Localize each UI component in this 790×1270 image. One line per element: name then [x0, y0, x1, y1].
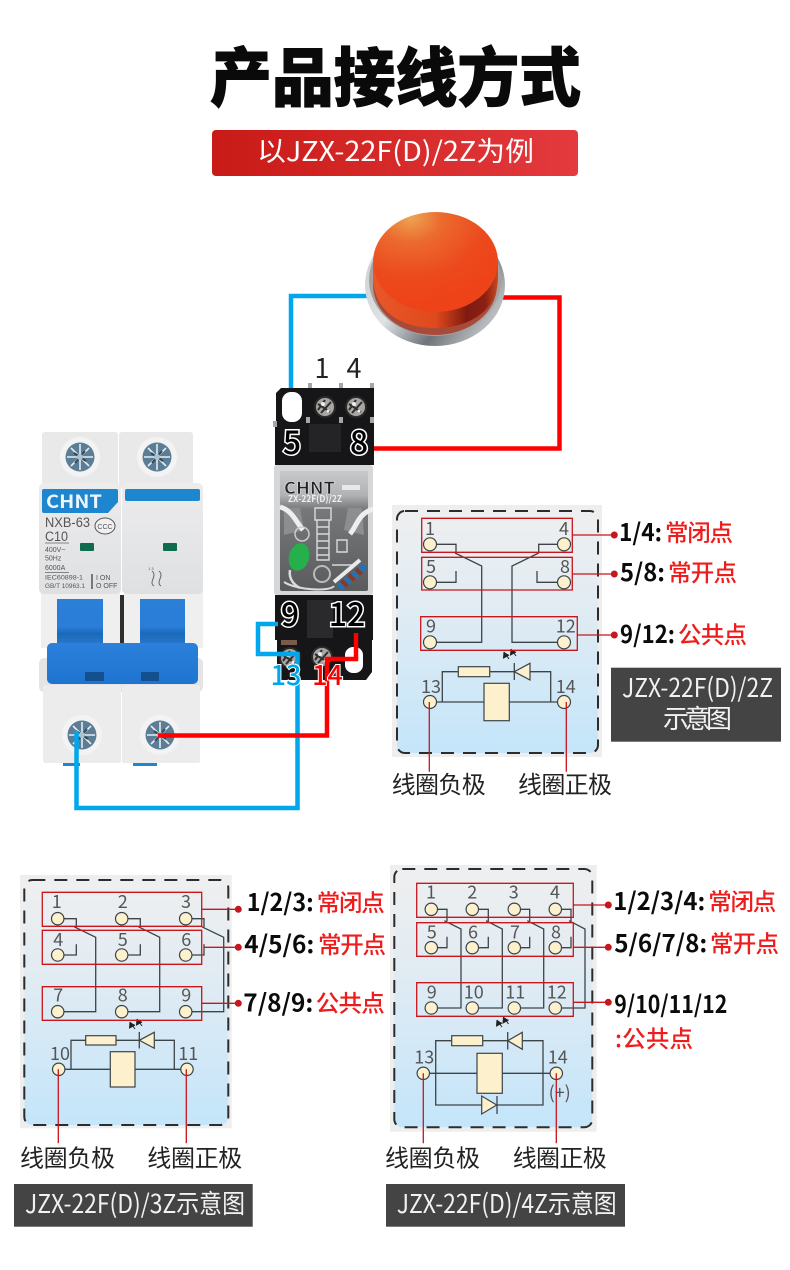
terminal points [417, 903, 562, 1080]
terminal numbers: 5 [426, 553, 436, 579]
coil labels: 3Z: 线圈负极 [20, 1139, 115, 1174]
indicator windows [80, 543, 177, 551]
coil labels: 4Z: 线圈正极 [513, 1139, 607, 1174]
relay terminal labels [271, 347, 368, 693]
callouts: 2Z contacts: 公共点 [678, 616, 747, 650]
leader lines [429, 535, 614, 772]
terminal numbers: 5 [427, 918, 437, 944]
wire: breaker to terminal 14 and 12 (red) [158, 633, 356, 736]
terminal numbers: 1 [425, 515, 435, 541]
leader lines [58, 909, 238, 1143]
callouts: 3Z contacts: 常开点 [318, 926, 386, 960]
relay terminal labels: 13 [271, 654, 301, 693]
photo: CHINT circuit breaker [39, 432, 203, 766]
upper socket recess [309, 424, 341, 452]
terminal numbers: 10 [464, 978, 484, 1004]
coil circuit [423, 1017, 556, 1114]
wire: button to terminal 5 (blue) [291, 296, 368, 425]
coil labels: 4Z [385, 1139, 607, 1174]
breaker specifications: NXB-63 [45, 515, 90, 530]
lower terminal screws [279, 640, 333, 669]
terminal numbers: 11 [178, 1040, 198, 1066]
red grouping boxes [417, 883, 573, 1016]
cover brand: CHNT [284, 474, 335, 499]
caption: 3Z: JZX-22F(D)/3Z示意图 [25, 1184, 245, 1221]
socket upper mounting hole [282, 392, 302, 422]
terminal numbers: 5 [118, 926, 128, 952]
terminal numbers: 14 [556, 673, 576, 699]
callouts: 3Z contacts: 7/8/9: [243, 984, 313, 1018]
terminal numbers: 11 [505, 978, 525, 1004]
terminal numbers: 4 [559, 515, 569, 541]
blue stripe [125, 489, 200, 501]
breaker specifications: 50Hz [45, 556, 62, 562]
terminal numbers: 1 [52, 888, 62, 914]
red grouping boxes [421, 518, 577, 650]
upper terminal screws [314, 396, 367, 418]
terminal numbers: 7 [510, 918, 520, 944]
terminal points [424, 538, 570, 708]
terminal numbers: 4 [53, 926, 63, 952]
contact wiring [58, 919, 224, 1012]
breaker specifications: I ON [96, 575, 110, 582]
breaker specifications: 1 3 [148, 566, 154, 571]
relay terminal labels: 12 [329, 590, 365, 636]
callouts: 3Z contacts: 常闭点 [317, 884, 385, 918]
socket lower mounting hole [345, 647, 363, 673]
callouts: 4Z contacts: 常开点 [710, 925, 779, 959]
terminal numbers: 1 [426, 878, 436, 904]
terminal numbers [414, 878, 571, 1105]
terminal numbers: 8 [118, 982, 128, 1008]
white band [334, 560, 360, 582]
resistor [339, 566, 365, 588]
terminal numbers: 13 [421, 673, 441, 699]
relay terminal labels: 9 [281, 590, 299, 636]
icon: red push button [365, 212, 505, 346]
brand badge [42, 488, 118, 514]
terminal numbers: 2 [118, 888, 128, 914]
socket upper block [275, 388, 374, 465]
relay terminal labels: 8 [350, 418, 368, 464]
breaker specifications: 6000A [45, 565, 66, 572]
blue handle [47, 643, 198, 684]
LED legs [290, 570, 300, 588]
cover model: ZX-22F(D)/2Z [288, 492, 342, 505]
relay clear cover [274, 465, 373, 595]
caption: 2Z [611, 668, 781, 742]
photo: relay with socket [273, 383, 374, 680]
caption: 2Z: JZX-22F(D)/2Z [622, 668, 773, 705]
terminal numbers: 9 [181, 982, 191, 1008]
coil labels: 2Z: 线圈负极 [392, 765, 486, 800]
callouts: 4Z contacts: :公共点 [615, 1020, 693, 1054]
terminal numbers: 2 [467, 878, 477, 904]
relay terminal labels: 14 [312, 654, 343, 693]
terminal numbers: 12 [556, 613, 576, 639]
breaker specifications: CCC [97, 524, 113, 531]
coil circuit [430, 649, 564, 721]
breaker specifications: O OFF [96, 583, 117, 590]
socket lower block [275, 595, 373, 680]
callouts: 3Z contacts [235, 883, 386, 1018]
terminal numbers: 8 [560, 553, 570, 579]
brand badge: CHNT [46, 488, 102, 514]
terminal numbers: 12 [547, 978, 567, 1004]
callouts: 3Z contacts: 公共点 [316, 984, 385, 1018]
coil circuit [59, 1019, 187, 1087]
terminal numbers [50, 888, 198, 1066]
terminal numbers: 3 [181, 888, 191, 914]
switch blocks [41, 590, 203, 648]
terminal numbers: 3 [509, 878, 519, 904]
coil labels: 2Z [392, 765, 612, 800]
callouts: 2Z contacts: 9/12: [620, 615, 675, 650]
breaker specifications: GB/T 10963.1 [45, 583, 85, 590]
contact metal plates [284, 508, 364, 535]
socket metal tabs [273, 383, 374, 427]
breaker specifications: IEC60898-1 [45, 574, 83, 582]
callouts: 2Z contacts: 常闭点 [665, 514, 733, 548]
coil labels: 2Z: 线圈正极 [518, 765, 612, 800]
breaker specifications: C10 [45, 529, 68, 544]
callouts: 2Z contacts: 1/4: [619, 513, 662, 548]
terminal numbers: 9 [426, 613, 436, 639]
breaker specifications: 400V~ [45, 547, 65, 554]
terminal points [52, 912, 193, 1076]
callouts: 4Z contacts: 1/2/3/4: [613, 882, 705, 917]
terminal numbers: 9 [427, 978, 437, 1004]
callouts: 4Z contacts [605, 882, 779, 1054]
callouts: 4Z contacts: 9/10/11/12 [614, 985, 727, 1020]
callouts: 2Z contacts [611, 513, 747, 650]
callouts: 2Z contacts: 5/8: [620, 553, 665, 588]
red grouping boxes [42, 892, 202, 1020]
subtitle banner [212, 130, 578, 176]
contact wiring [431, 909, 585, 1008]
terminal numbers: 6 [468, 918, 478, 944]
green LED [286, 541, 312, 573]
top terminals [42, 432, 193, 488]
caption: 4Z: JZX-22F(D)/4Z示意图 [397, 1184, 617, 1221]
front panel [39, 483, 203, 594]
lower socket recess [307, 600, 333, 638]
terminal numbers: 6 [181, 926, 191, 952]
wire: button to terminal 8 (red) [371, 298, 560, 448]
terminal numbers: 10 [50, 1040, 70, 1066]
callouts: 4Z contacts: 5/6/7/8: [614, 924, 707, 959]
relay terminal labels: 4 [346, 347, 362, 386]
wire: breaker to terminal 13 and 9 loop (blue) [76, 624, 298, 808]
callouts: 4Z contacts: 常闭点 [708, 883, 776, 917]
panel: 2Z schematic [392, 505, 614, 772]
terminal numbers [421, 515, 576, 699]
white contact arcs [280, 507, 373, 534]
caption: 2Z: 示意图 [663, 699, 732, 736]
terminal numbers: 7 [53, 982, 63, 1008]
terminal numbers: 13 [414, 1043, 434, 1069]
subtitle banner: 以JZX-22F(D)/2Z为例 [257, 130, 534, 169]
relay terminal labels: 1 [314, 347, 330, 386]
breaker specifications [45, 515, 161, 590]
contact wiring [430, 544, 564, 642]
terminal numbers: 4 [550, 878, 560, 904]
coil labels: 4Z: 线圈负极 [385, 1139, 480, 1174]
callouts: 3Z contacts: 4/5/6: [244, 925, 314, 960]
relay terminal labels: 5 [283, 418, 301, 464]
terminal numbers: (+) [549, 1079, 571, 1105]
terminal numbers: 8 [551, 918, 561, 944]
terminal numbers: 14 [548, 1043, 568, 1069]
title: 产品接线方式 [210, 28, 581, 120]
coil labels: 3Z [20, 1139, 242, 1174]
coil labels: 3Z: 线圈正极 [147, 1139, 242, 1174]
bottom terminals [39, 658, 203, 766]
callouts: 2Z contacts: 常开点 [668, 554, 737, 588]
callouts: 3Z contacts: 1/2/3: [247, 883, 314, 918]
coil drawing [315, 508, 352, 565]
panel: 3Z schematic [20, 875, 238, 1143]
leader lines [423, 905, 608, 1143]
panel: 4Z schematic [390, 865, 608, 1143]
